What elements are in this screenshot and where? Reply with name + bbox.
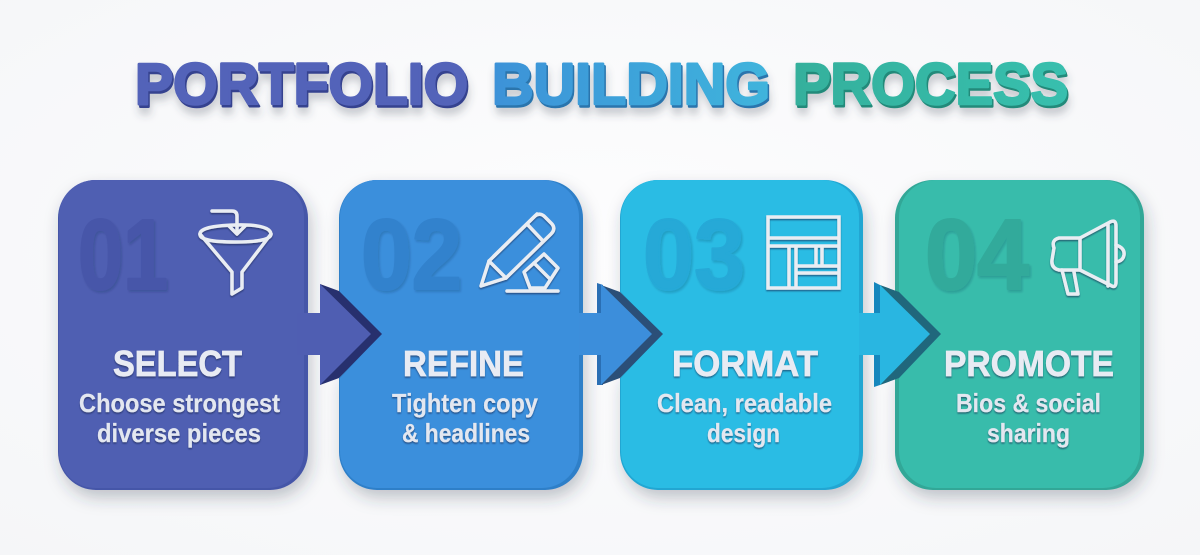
arrow 2	[579, 283, 663, 385]
description	[392, 388, 538, 448]
title word: BUILDING: BUILDING	[494, 54, 772, 120]
icon: funnel	[200, 211, 271, 294]
panel: step 1 select	[58, 180, 382, 490]
panel: step 3 format	[620, 180, 941, 490]
title word: PROCESS: PROCESS	[794, 54, 1070, 120]
label FORMAT: FORMAT	[672, 343, 818, 384]
arrow 3	[859, 282, 941, 387]
description	[956, 388, 1101, 448]
icon: megaphone	[1052, 221, 1124, 294]
number 03: 03	[643, 199, 745, 311]
arrow 1	[297, 284, 382, 385]
panel: step 4 promote	[895, 180, 1144, 490]
description: Choose strongest	[79, 388, 280, 418]
description: sharing	[987, 418, 1070, 448]
number 04: 04	[925, 199, 1029, 311]
title word: BUILDING: BUILDING	[492, 52, 770, 117]
card 3 body	[620, 180, 863, 490]
icon: pencil and eraser	[481, 214, 558, 291]
panel: step 2 refine	[339, 180, 663, 490]
description: diverse pieces	[97, 418, 261, 448]
number 01: 01	[78, 199, 168, 311]
label REFINE: REFINE	[403, 343, 524, 384]
card 4 body	[895, 180, 1144, 490]
label PROMOTE: PROMOTE	[944, 343, 1114, 384]
description	[657, 388, 832, 448]
title word: PORTFOLIO: PORTFOLIO	[135, 52, 468, 117]
icon: page layout	[768, 217, 839, 288]
description: & headlines	[402, 418, 530, 448]
description: Clean, readable	[657, 388, 832, 418]
title word: PORTFOLIO: PORTFOLIO	[136, 54, 470, 120]
card 2 body	[339, 180, 583, 490]
title	[135, 52, 1070, 120]
description: design	[707, 418, 780, 448]
description: Bios & social	[956, 388, 1101, 418]
label SELECT: SELECT	[113, 343, 242, 384]
number 02: 02	[361, 199, 462, 311]
title word: PROCESS: PROCESS	[793, 52, 1068, 117]
description	[79, 388, 280, 448]
card 1 body	[58, 180, 308, 490]
description: Tighten copy	[392, 388, 538, 418]
